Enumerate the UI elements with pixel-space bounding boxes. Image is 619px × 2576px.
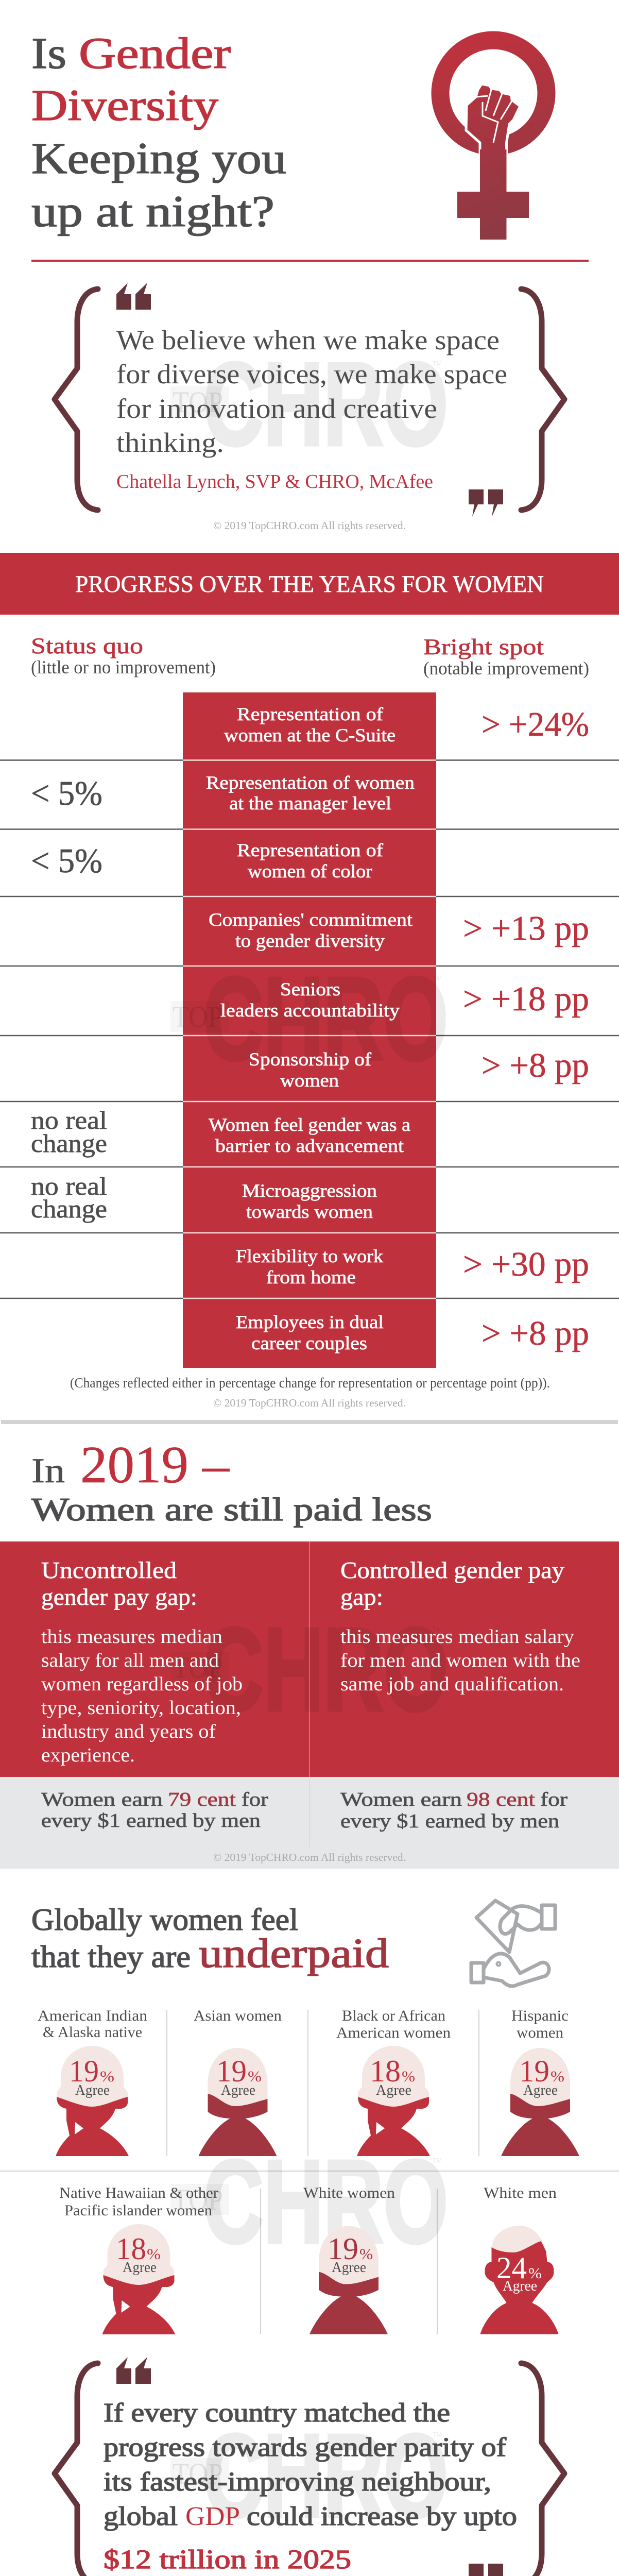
row: seniors leaders accountability: leaders accountability [220, 1000, 400, 1021]
closing quote mark [469, 2564, 503, 2576]
watermark: TopCHRO [170, 339, 448, 470]
watermark: TopCHRO: CHRO [203, 339, 448, 470]
row: manager level: < 5% [31, 774, 102, 812]
row: manager level: at the manager level [229, 793, 391, 814]
copyright note: © 2019 TopCHRO.com All rights reserved. [213, 519, 406, 532]
group: American Indian and Alaska native women: & Alaska native [43, 2024, 142, 2041]
column: controlled gender pay gap: this measures median salary [340, 1626, 574, 1648]
watermark: TopCHRO: CHRO [203, 954, 448, 1084]
column: uncontrolled gender pay gap: Uncontrolled [41, 1557, 177, 1583]
column: uncontrolled gender pay gap: industry and years of [41, 1721, 216, 1742]
quote text: for diverse voices, we make space [116, 359, 507, 389]
quote text: its fastest-improving neighbour, [104, 2467, 491, 2497]
quote text: could increase by upto [247, 2502, 517, 2531]
watermark: TopCHRO: TOP [173, 2183, 223, 2216]
watermark: TopCHRO: TOP [173, 2457, 223, 2490]
row: gender barrier: Women feel gender was a [209, 1114, 410, 1135]
row: women of color: < 5% [31, 842, 102, 880]
quote text [104, 2398, 517, 2574]
group: Hispanic women: % [551, 2068, 564, 2085]
title: Keeping you [31, 133, 286, 183]
row: dual career couples: Employees in dual [236, 1312, 384, 1332]
quote text: for innovation and creative [116, 393, 437, 424]
row: sponsorship: women [280, 1070, 339, 1091]
row: women of color: Representation of [237, 840, 383, 860]
group: Native Hawaiian and Pacific islander women: Pacific islander women [64, 2202, 212, 2219]
group: Native Hawaiian and Pacific islander women [59, 2184, 218, 2334]
row: sponsorship [249, 1046, 589, 1091]
group: Hispanic women: 19 [519, 2054, 549, 2088]
heading: in 2019 women are still paid less [31, 1436, 432, 1528]
heading: in 2019 women are still paid less: 2019 [80, 1436, 188, 1494]
column: controlled gender pay gap [340, 1557, 580, 1832]
row: seniors leaders accountability: Seniors [280, 979, 340, 999]
watermark: TopCHRO [170, 2137, 448, 2267]
row: sponsorship: Sponsorship of [249, 1049, 371, 1070]
group: Black or African American women: Agree [376, 2082, 411, 2098]
dividers between demographic columns [0, 2010, 619, 2334]
column: controlled gender pay gap: gap: [340, 1584, 383, 1610]
column: uncontrolled gender pay gap: gender pay gap: [41, 1584, 197, 1610]
row: sponsorship: > +8 pp [482, 1046, 589, 1084]
watermark: TopCHRO [170, 1604, 448, 1735]
group: White women: White women [303, 2184, 395, 2201]
group: Asian women: 19 [216, 2054, 247, 2088]
row: manager level [31, 772, 415, 814]
row: microaggression: no real [31, 1172, 107, 1200]
title: Gender [79, 28, 231, 78]
group: Asian women: Agree [221, 2082, 255, 2098]
left bracket [55, 2363, 98, 2576]
copyright note: © 2019 TopCHRO.com All rights reserved. [213, 1851, 406, 1863]
watermark: TopCHRO: TOP [173, 1651, 223, 1684]
row: companies' commitment: to gender diversity [235, 930, 385, 951]
column: uncontrolled gender pay gap: this measures median [41, 1626, 222, 1648]
row: flexibility: from home [266, 1267, 356, 1287]
quote text: thinking. [116, 427, 224, 458]
column header: bright spot: (notable improvement) [423, 658, 589, 679]
column: controlled gender pay gap: same job and qualification. [340, 1673, 564, 1695]
group: Asian women: % [248, 2068, 262, 2085]
group: Black or African American women: American women [336, 2024, 451, 2041]
group: American Indian and Alaska native women: % [100, 2068, 114, 2085]
row: dual career couples [236, 1312, 589, 1353]
watermark: TopCHRO: TM [433, 360, 442, 367]
row: women at the C-suite: women at the C-Suite [224, 725, 396, 745]
section separator [1, 1420, 618, 1424]
column: controlled gender pay gap: for [540, 1789, 568, 1810]
row: seniors leaders accountability: > +18 pp [463, 980, 589, 1018]
table: progress over the years [0, 634, 619, 1368]
watermark: TopCHRO [170, 954, 448, 1084]
watermark: TopCHRO: CHRO [203, 2137, 448, 2267]
row: women of color: women of color [248, 861, 372, 882]
heading: globally women feel underpaid: that they are [31, 1940, 191, 1974]
title: up at night? [31, 187, 274, 236]
group: Asian women [194, 2007, 282, 2156]
divider rule [31, 260, 589, 262]
row: gender barrier: no real [31, 1106, 107, 1134]
watermark: TopCHRO: TM [433, 2157, 442, 2164]
heading: globally women feel underpaid: Globally women feel [31, 1903, 298, 1937]
quote text: We believe when we make space [116, 325, 500, 355]
panel: GDP quote [55, 2357, 564, 2576]
opening quote mark [116, 2357, 151, 2384]
row: dual career couples: > +8 pp [482, 1314, 589, 1352]
row: companies' commitment: Companies' commitment [209, 909, 412, 930]
group: Native Hawaiian and Pacific islander women: 18 [116, 2232, 146, 2266]
watermark: TopCHRO: TOP [173, 385, 223, 419]
column: uncontrolled gender pay gap: salary for all men and [41, 1650, 219, 1671]
column: controlled gender pay gap: Women earn [340, 1789, 462, 1810]
heading: globally women feel underpaid [31, 1903, 389, 1976]
watermark: TopCHRO: TM [433, 1625, 442, 1633]
column: uncontrolled gender pay gap: 79 cent [168, 1789, 236, 1810]
group: Asian women: Asian women [194, 2007, 282, 2024]
row: microaggression: Microaggression [242, 1180, 377, 1201]
group: White men: Agree [503, 2278, 537, 2294]
group: Black or African American women: Black or African [342, 2007, 445, 2024]
group: White women: % [359, 2246, 373, 2263]
row: women of color [31, 840, 383, 882]
heading: in 2019 women are still paid less: – [202, 1436, 230, 1494]
centre column [183, 692, 436, 1368]
column header: bright spot [423, 635, 589, 679]
group: Black or African American women [336, 2007, 451, 2156]
group: American Indian and Alaska native women: Agree [75, 2082, 110, 2098]
row: microaggression: change [31, 1194, 107, 1223]
column: controlled gender pay gap: every $1 earned by men [340, 1810, 559, 1832]
column: uncontrolled gender pay gap: experience. [41, 1744, 135, 1766]
left bracket [55, 289, 98, 510]
quote text: progress towards gender parity of [104, 2433, 507, 2462]
group: Hispanic women [501, 2007, 579, 2156]
quote text [116, 325, 507, 458]
column: uncontrolled gender pay gap: women regardless of job [41, 1673, 243, 1695]
column: uncontrolled gender pay gap: every $1 earned by men [41, 1810, 261, 1832]
row: gender barrier: barrier to advancement [215, 1136, 404, 1156]
column: uncontrolled gender pay gap: Women earn [41, 1789, 163, 1810]
heading banner: progress over the years: PROGRESS OVER THE YEARS FOR WOMEN [75, 571, 544, 598]
title: Diversity [31, 80, 218, 130]
quote text: global [104, 2502, 178, 2531]
watermark: TopCHRO: CHRO [203, 2411, 448, 2541]
column: uncontrolled gender pay gap [41, 1557, 268, 1832]
heading: globally women feel underpaid: underpaid [199, 1931, 389, 1976]
group: White men [480, 2184, 558, 2334]
group: American Indian and Alaska native women: 19 [69, 2054, 99, 2088]
column header: status quo: (little or no improvement) [31, 657, 216, 677]
quote attribution: Chatella Lynch, SVP & CHRO, McAfee [116, 471, 433, 493]
watermark: TopCHRO: TM [433, 2431, 442, 2438]
row: microaggression: towards women [246, 1201, 373, 1222]
column: controlled gender pay gap: 98 cent [467, 1789, 536, 1810]
group: Native Hawaiian and Pacific islander women: Agree [123, 2259, 157, 2276]
row: companies' commitment [209, 909, 589, 951]
quote text: GDP [185, 2502, 240, 2531]
row: flexibility: > +30 pp [463, 1245, 589, 1283]
column header: status quo [31, 634, 216, 677]
column: controlled gender pay gap: for men and women with the [340, 1650, 580, 1671]
group: White men: 24 [496, 2251, 527, 2285]
watermark: TopCHRO: CHRO [203, 1604, 448, 1735]
row: flexibility: Flexibility to work [236, 1246, 383, 1266]
group: White men: White men [484, 2184, 557, 2201]
row: microaggression [31, 1172, 377, 1223]
row: seniors leaders accountability [220, 979, 589, 1021]
group: Native Hawaiian and Pacific islander women: Native Hawaiian & other [59, 2184, 218, 2201]
group: White women: 19 [328, 2232, 358, 2266]
icon: female symbol with raised fist [440, 40, 546, 240]
row: gender barrier: change [31, 1129, 107, 1158]
heading banner: progress over the years [0, 553, 619, 615]
heading: in 2019 women are still paid less: In [31, 1451, 65, 1490]
group: Black or African American women: % [402, 2068, 415, 2085]
watermark: TopCHRO: TOP [173, 1000, 223, 1033]
right bracket [521, 2363, 564, 2576]
group: Hispanic women: Agree [523, 2082, 558, 2098]
panel: executive quote [55, 283, 564, 517]
group: Native Hawaiian and Pacific islander women: % [147, 2246, 161, 2263]
group: White women [303, 2184, 395, 2334]
group: White women: Agree [332, 2259, 366, 2276]
group: American Indian and Alaska native women [38, 2007, 147, 2156]
group: Black or African American women: 18 [370, 2054, 401, 2088]
row: gender barrier [31, 1106, 410, 1158]
quote text: $12 trillion in 2025 [104, 2545, 351, 2574]
copyright note: © 2019 TopCHRO.com All rights reserved. [213, 1397, 406, 1409]
quote text: If every country matched the [104, 2398, 450, 2428]
heading: in 2019 women are still paid less: Women are still paid less [31, 1491, 432, 1528]
row: manager level: Representation of women [206, 772, 415, 793]
opening quote mark [116, 283, 151, 310]
right bracket [521, 289, 564, 510]
row: women at the C-suite: > +24% [482, 705, 589, 743]
row: women at the C-suite [224, 704, 589, 745]
closing quote mark [469, 489, 503, 517]
column: controlled gender pay gap: Controlled gender pay [340, 1557, 564, 1583]
group: Hispanic women: Hispanic [511, 2007, 569, 2024]
row: women at the C-suite: Representation of [237, 704, 383, 724]
watermark: TopCHRO [170, 2411, 448, 2541]
column header: status quo: Status quo [31, 634, 143, 658]
column: uncontrolled gender pay gap: type, seniority, location, [41, 1697, 241, 1719]
icon: hands exchanging money [471, 1901, 555, 1986]
group: American Indian and Alaska native women: American Indian [38, 2007, 147, 2024]
panel: pay gap comparison [0, 1541, 619, 1869]
column header: bright spot: Bright spot [423, 635, 544, 659]
watermark: TopCHRO: TM [433, 974, 442, 982]
table footnote: (Changes reflected either in percentage change for representation or percentage point (pp)). [70, 1375, 550, 1391]
row: companies' commitment: > +13 pp [463, 909, 589, 947]
title [31, 28, 286, 236]
column: uncontrolled gender pay gap: for [242, 1789, 268, 1810]
group: White men: % [528, 2265, 542, 2282]
row: dual career couples: career couples [251, 1333, 367, 1353]
row: flexibility [236, 1245, 589, 1287]
title: Is [31, 28, 66, 78]
group: Hispanic women: women [517, 2024, 563, 2041]
